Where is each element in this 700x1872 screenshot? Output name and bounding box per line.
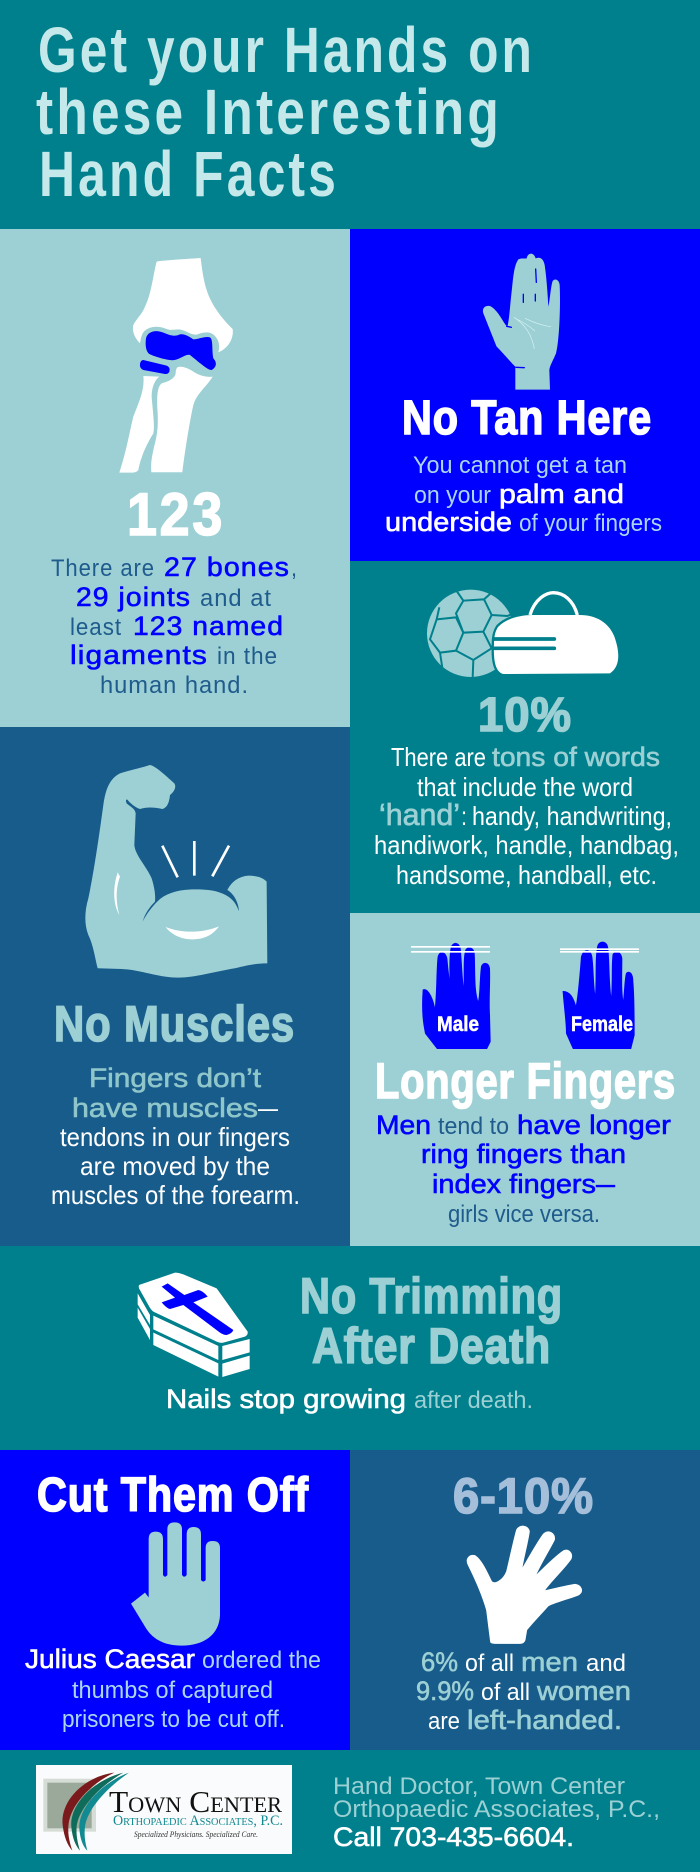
text: left-handed stats — [416, 1647, 631, 1735]
text: bones, joints, ligaments: human hand. — [100, 672, 249, 699]
text: tan fact: You cannot get a tan — [413, 452, 627, 479]
text: hand words: : — [461, 801, 467, 831]
footer — [0, 1750, 700, 1872]
icon: handball and gym bag — [427, 590, 618, 678]
text: nails fact: after death. — [414, 1387, 533, 1414]
text: contact: Call 703-435-6604. — [333, 1822, 574, 1852]
text: tan fact: on your — [414, 482, 491, 509]
heading: No Trimming After Death — [300, 1268, 563, 1374]
text: hand words: handiwork, handle, handbag, — [374, 830, 679, 860]
text: Caesar fact: ordered the — [202, 1647, 321, 1674]
icon: spread hand — [467, 1526, 581, 1643]
panel: no muscles — [0, 727, 350, 1246]
panel: words with hand — [350, 561, 700, 913]
panel: no trimming after death — [0, 1246, 700, 1450]
title: Get your Hands on — [38, 14, 535, 86]
text: tan fact: underside — [385, 507, 512, 537]
text: Caesar fact — [25, 1644, 321, 1733]
text: Caesar fact: Julius Caesar — [25, 1644, 195, 1674]
text: muscles fact: are moved by the — [80, 1151, 270, 1181]
logo: Town Center Orthopaedic Associates: Orthopaedic Associates, P.C. — [113, 1813, 283, 1829]
panel: no tan here — [350, 229, 700, 561]
text: bones, joints, ligaments: 27 bones — [164, 552, 290, 582]
text: hand words: tons of words — [492, 742, 660, 772]
text: Caesar fact: thumbs of captured — [72, 1677, 273, 1704]
text: hand words: that include the word — [417, 772, 633, 802]
text: nails fact: Nails stop growing — [166, 1384, 406, 1414]
text: left-handed stats: of all — [465, 1650, 514, 1677]
text: muscles fact: tendons in our fingers — [60, 1122, 290, 1152]
text: muscles fact — [51, 1063, 300, 1210]
icon: male and female hands — [411, 942, 639, 1048]
title — [36, 14, 535, 210]
text: finger fact: index fingers — [432, 1169, 596, 1199]
icon: elbow joint bones — [119, 258, 233, 473]
text: muscles fact: — — [258, 1093, 278, 1123]
text: left-handed stats: 9.9% — [416, 1676, 474, 1706]
text: left-handed stats: are — [428, 1708, 460, 1735]
text: hand words: ‘hand’ — [379, 797, 460, 832]
heading: No Trimming After Death: After Death — [312, 1318, 551, 1374]
text: hand words: handsome, handball, etc. — [396, 860, 657, 890]
text: finger fact — [376, 1110, 671, 1228]
text: left-handed stats: and — [586, 1650, 626, 1677]
text: left-handed stats: left-handed. — [467, 1705, 622, 1735]
text: bones, joints, ligaments: and at — [200, 585, 272, 612]
text: muscles fact: Fingers don’t — [89, 1063, 262, 1093]
text: finger fact: have longer — [517, 1110, 671, 1140]
text: bones, joints, ligaments: 29 joints — [76, 582, 191, 612]
text: hand words — [374, 742, 679, 890]
panel: cut them off — [0, 1450, 350, 1750]
text: left-handed stats: women — [536, 1676, 631, 1706]
icon: male and female hands: Male — [437, 1013, 479, 1036]
text: muscles fact: muscles of the forearm. — [51, 1180, 300, 1210]
text: tan fact — [385, 452, 662, 537]
text: hand words: handy, handwriting, — [472, 801, 672, 831]
text: tan fact: palm and — [499, 479, 624, 509]
text: Caesar fact: prisoners to be cut off. — [62, 1706, 285, 1733]
heading: No Tan Here: No Tan Here — [402, 392, 652, 445]
text: contact: Orthopaedic Associates, P.C., — [333, 1796, 660, 1823]
icon: male and female hands: Female — [571, 1013, 633, 1036]
icon: coffin — [138, 1273, 250, 1377]
panel: left-handed — [350, 1450, 700, 1750]
text: left-handed stats: 6% — [421, 1647, 458, 1677]
text: left-handed stats: men — [521, 1647, 578, 1677]
text: finger fact: ring fingers than — [421, 1139, 626, 1169]
title: these Interesting — [36, 76, 502, 148]
heading: Cut Them Off: Cut Them Off — [37, 1469, 309, 1522]
text: bones, joints, ligaments — [51, 552, 297, 699]
text: bones, joints, ligaments: There are — [51, 555, 155, 582]
icon: flexed arm — [85, 765, 267, 978]
text: finger fact: — — [596, 1169, 615, 1199]
title: Hand Facts — [39, 138, 339, 210]
text: finger fact: tend to — [438, 1113, 509, 1140]
text: finger fact: girls vice versa. — [448, 1201, 600, 1228]
text: left-handed stats: of all — [481, 1679, 530, 1706]
text: hand words: There are — [391, 742, 486, 772]
text: bones, joints, ligaments: , — [291, 555, 297, 582]
text: tan fact: of your fingers — [519, 510, 662, 537]
heading: No Trimming After Death: No Trimming — [300, 1268, 563, 1324]
logo: Town Center Orthopaedic Associates: Specialized Physicians. Specialized Care. — [134, 1830, 258, 1839]
panel: longer fingers — [350, 913, 700, 1246]
text: muscles fact: have muscles — [72, 1093, 258, 1123]
text: contact: Hand Doctor, Town Center — [333, 1773, 625, 1800]
text: bones, joints, ligaments: ligaments — [70, 640, 208, 670]
text: finger fact: Men — [376, 1110, 431, 1140]
heading: 6-10%: 6-10% — [453, 1468, 594, 1524]
text: bones, joints, ligaments: least — [70, 614, 122, 641]
heading: 10%: 10% — [478, 689, 572, 742]
heading: No Muscles: No Muscles — [54, 996, 295, 1052]
text: bones, joints, ligaments: 123 named — [133, 611, 284, 641]
panel: 123 ligaments — [0, 229, 350, 727]
text: contact — [333, 1773, 660, 1852]
text: bones, joints, ligaments: in the — [217, 643, 278, 670]
logo: Town Center Orthopaedic Associates — [36, 1765, 292, 1854]
icon: open palm — [483, 254, 560, 390]
logo: Town Center Orthopaedic Associates: Town Center — [109, 1784, 282, 1819]
text: nails fact — [166, 1384, 533, 1414]
icon: hand without thumb — [131, 1522, 220, 1646]
heading: 123: 123 — [127, 481, 225, 548]
